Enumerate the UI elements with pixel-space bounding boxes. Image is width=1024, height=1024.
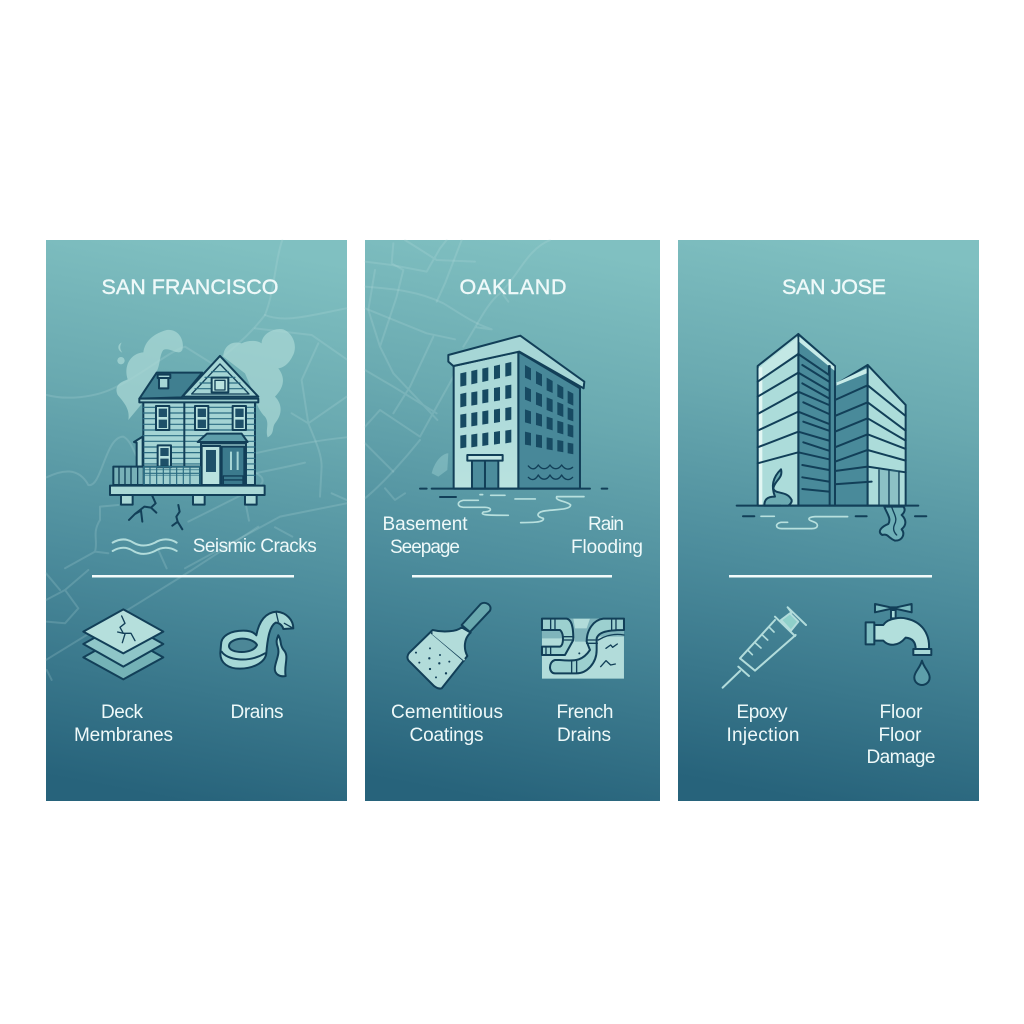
solution: cementitious coatings [391, 603, 503, 746]
house walls [143, 402, 255, 485]
deck railing [113, 467, 200, 485]
street map: Oakland [365, 240, 550, 500]
left tower [798, 334, 835, 506]
label text: Floor [880, 702, 923, 723]
side wall [518, 352, 580, 489]
icon: seismic waves [113, 539, 177, 554]
label text: Cementitious [391, 702, 503, 723]
solution: deck membranes: Membranes [74, 725, 173, 746]
flood waves on wall [528, 465, 573, 480]
panel background: Oakland [365, 240, 660, 801]
roof [139, 373, 202, 399]
panel background: San Jose [678, 240, 979, 801]
street map: San Francisco [46, 240, 347, 680]
issue label: flooding: Flooding [571, 537, 643, 558]
roof slab [448, 336, 584, 388]
foundation leak [880, 507, 905, 541]
entrance [472, 460, 498, 489]
water drop [914, 661, 930, 685]
title: San Francisco: SAN FRANCISCO [102, 275, 278, 299]
deck platform and footings [110, 486, 265, 495]
icon: syringe [723, 607, 806, 688]
puddle [761, 516, 848, 529]
solution: epoxy injection [723, 607, 806, 746]
issue label: seepage line: Seepage [390, 537, 460, 558]
solution: floor damage: Floor [878, 725, 922, 746]
windows [460, 362, 573, 454]
solution: drains [220, 612, 293, 723]
icon: dripping faucet [866, 604, 931, 685]
illustration: high-rise towers with leaks [737, 334, 926, 541]
panel background: San Francisco [46, 240, 347, 801]
label text: Seismic Cracks [193, 536, 317, 557]
icon: coiled drain pipe [220, 612, 293, 676]
label text: Drains [230, 702, 284, 723]
foundation cracks [129, 496, 182, 529]
panel: San Francisco [46, 240, 347, 801]
side annex [134, 437, 143, 467]
icon: french drain pipes [542, 619, 624, 679]
solution: floor damage: Damage [866, 747, 936, 768]
illustration: cracked house with mold plumes [110, 329, 295, 529]
issue label: rain: Rain [588, 514, 624, 535]
ground line [420, 489, 607, 497]
seepage stain [432, 453, 448, 477]
title: Oakland: OAKLAND [460, 275, 566, 299]
panel: Oakland [365, 240, 660, 801]
label text: French [556, 702, 614, 723]
divider [729, 575, 932, 578]
title: San Jose: SAN JOSE [782, 275, 886, 299]
divider [92, 575, 294, 578]
solution: french drains [542, 619, 624, 746]
solution: cementitious coatings: Coatings [410, 725, 484, 746]
issue label: seismic cracks [113, 536, 317, 557]
dormer chimney [158, 375, 170, 378]
solution: floor damage [866, 604, 936, 768]
divider [412, 575, 612, 578]
solution: epoxy injection: Injection [726, 725, 800, 746]
issue label: basement seepage: Basement [382, 514, 468, 535]
solution: deck membranes [74, 609, 173, 746]
icon: paint brush [407, 603, 491, 689]
entry porch [201, 443, 246, 485]
ground line [737, 506, 926, 516]
label text: Deck [101, 702, 144, 723]
mold stain on wall [764, 469, 792, 506]
icon: layered membranes [83, 609, 163, 679]
mold plumes [116, 329, 295, 437]
floodwater [458, 495, 584, 523]
right tower [835, 365, 868, 506]
front wall [454, 352, 518, 489]
illustration: flooded office building [420, 336, 607, 523]
gable [182, 356, 258, 397]
panel: San Jose [678, 240, 979, 801]
solution: french drains: Drains [557, 725, 611, 746]
upper windows [156, 406, 246, 467]
label text: Epoxy [736, 702, 788, 723]
